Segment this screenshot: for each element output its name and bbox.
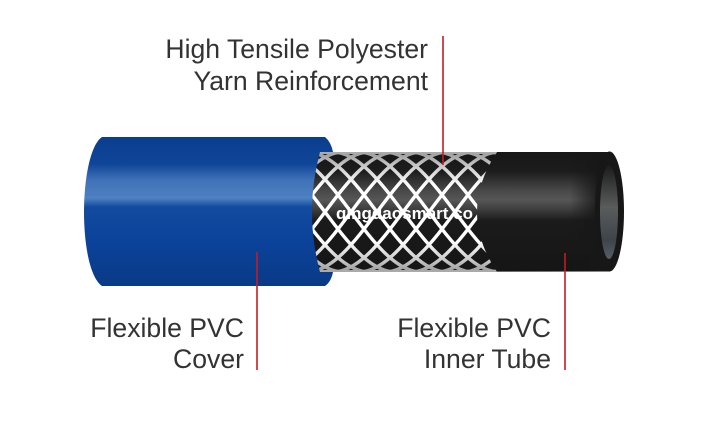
tube bore opening [600, 165, 618, 259]
label: yarn reinforcement: Yarn Reinforcement [193, 66, 429, 96]
label: yarn reinforcement: High Tensile Polyester [165, 34, 428, 64]
label: inner tube: Flexible PVC [397, 313, 551, 343]
label: PVC cover [90, 313, 244, 374]
black inner tube [312, 152, 624, 272]
polyester yarn braid [312, 152, 497, 272]
tube end ring [595, 152, 624, 272]
watermark: qingdaosmart.co [336, 204, 473, 223]
blue PVC cover [84, 137, 333, 286]
leader line: inner tube [564, 253, 566, 370]
hose illustration [84, 137, 656, 286]
leader line: yarn reinforcement [442, 36, 444, 165]
label: PVC cover: Cover [173, 344, 244, 374]
label: PVC cover: Flexible PVC [90, 313, 244, 343]
label: yarn reinforcement [165, 34, 429, 96]
leader line: PVC cover [256, 252, 258, 370]
label: inner tube [397, 313, 551, 374]
label: inner tube: Inner Tube [424, 344, 551, 374]
infographic: hose construction diagram [84, 36, 624, 370]
